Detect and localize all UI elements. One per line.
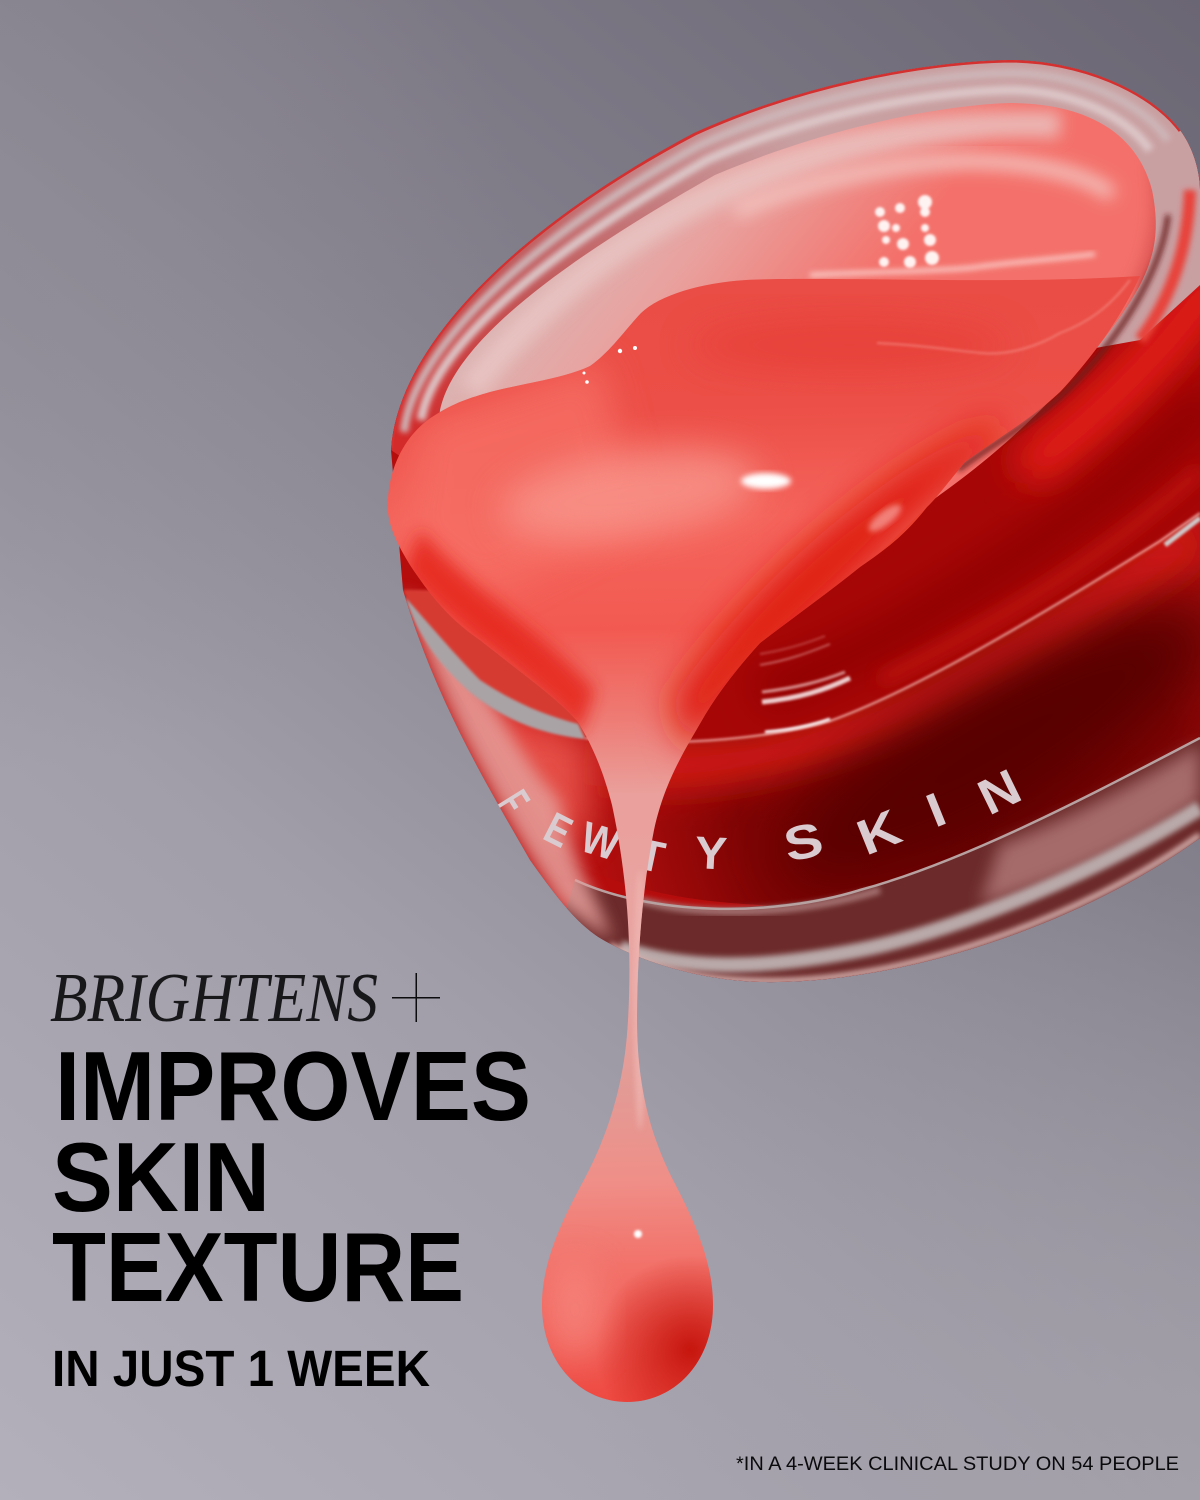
dark inner glass edge xyxy=(958,215,1168,470)
cream flowing and drip xyxy=(388,276,1140,1410)
left translucent edge xyxy=(403,590,612,940)
glass rim bands xyxy=(391,60,1200,470)
italic lead-in: BRIGHTENS xyxy=(50,960,378,1037)
left glass window under cream xyxy=(403,590,590,738)
label band xyxy=(500,554,1200,906)
embossed brand name: K xyxy=(849,799,909,866)
jar opening xyxy=(440,103,1156,498)
embossed brand name: N xyxy=(969,758,1030,826)
embossed brand name: Y xyxy=(693,826,728,879)
embossed brand name: S xyxy=(779,812,828,873)
thin plus sign xyxy=(392,973,440,1022)
cream sparkles xyxy=(582,346,905,1238)
embossed brand name: I xyxy=(919,782,953,837)
cream wisps xyxy=(877,280,1130,353)
base glass band xyxy=(567,740,1200,982)
embossed brand name: T xyxy=(634,830,669,883)
cream highlight xyxy=(741,473,791,489)
embossed brand name: W xyxy=(575,812,626,870)
sub-headline: IN JUST 1 WEEK xyxy=(52,1340,430,1397)
red bowl below opening xyxy=(585,342,1200,738)
main headline line three: TEXTURE xyxy=(52,1212,464,1322)
headline xyxy=(50,960,531,1397)
embossed brand name: F xyxy=(489,782,539,822)
jar body xyxy=(380,40,1200,1000)
footnote: *IN A 4-WEEK CLINICAL STUDY ON 54 PEOPLE xyxy=(736,1454,1179,1475)
bowl lip highlight xyxy=(585,513,1200,742)
embossed brand name xyxy=(489,758,1030,883)
product: cosmetic jar xyxy=(380,40,1200,1000)
main headline line one: IMPROVES xyxy=(55,1031,531,1141)
ribbed glass streaks xyxy=(762,678,850,702)
embossed brand name: E xyxy=(536,804,579,858)
main headline line two: SKIN xyxy=(52,1122,270,1232)
light reflection on cream surface xyxy=(875,195,939,268)
